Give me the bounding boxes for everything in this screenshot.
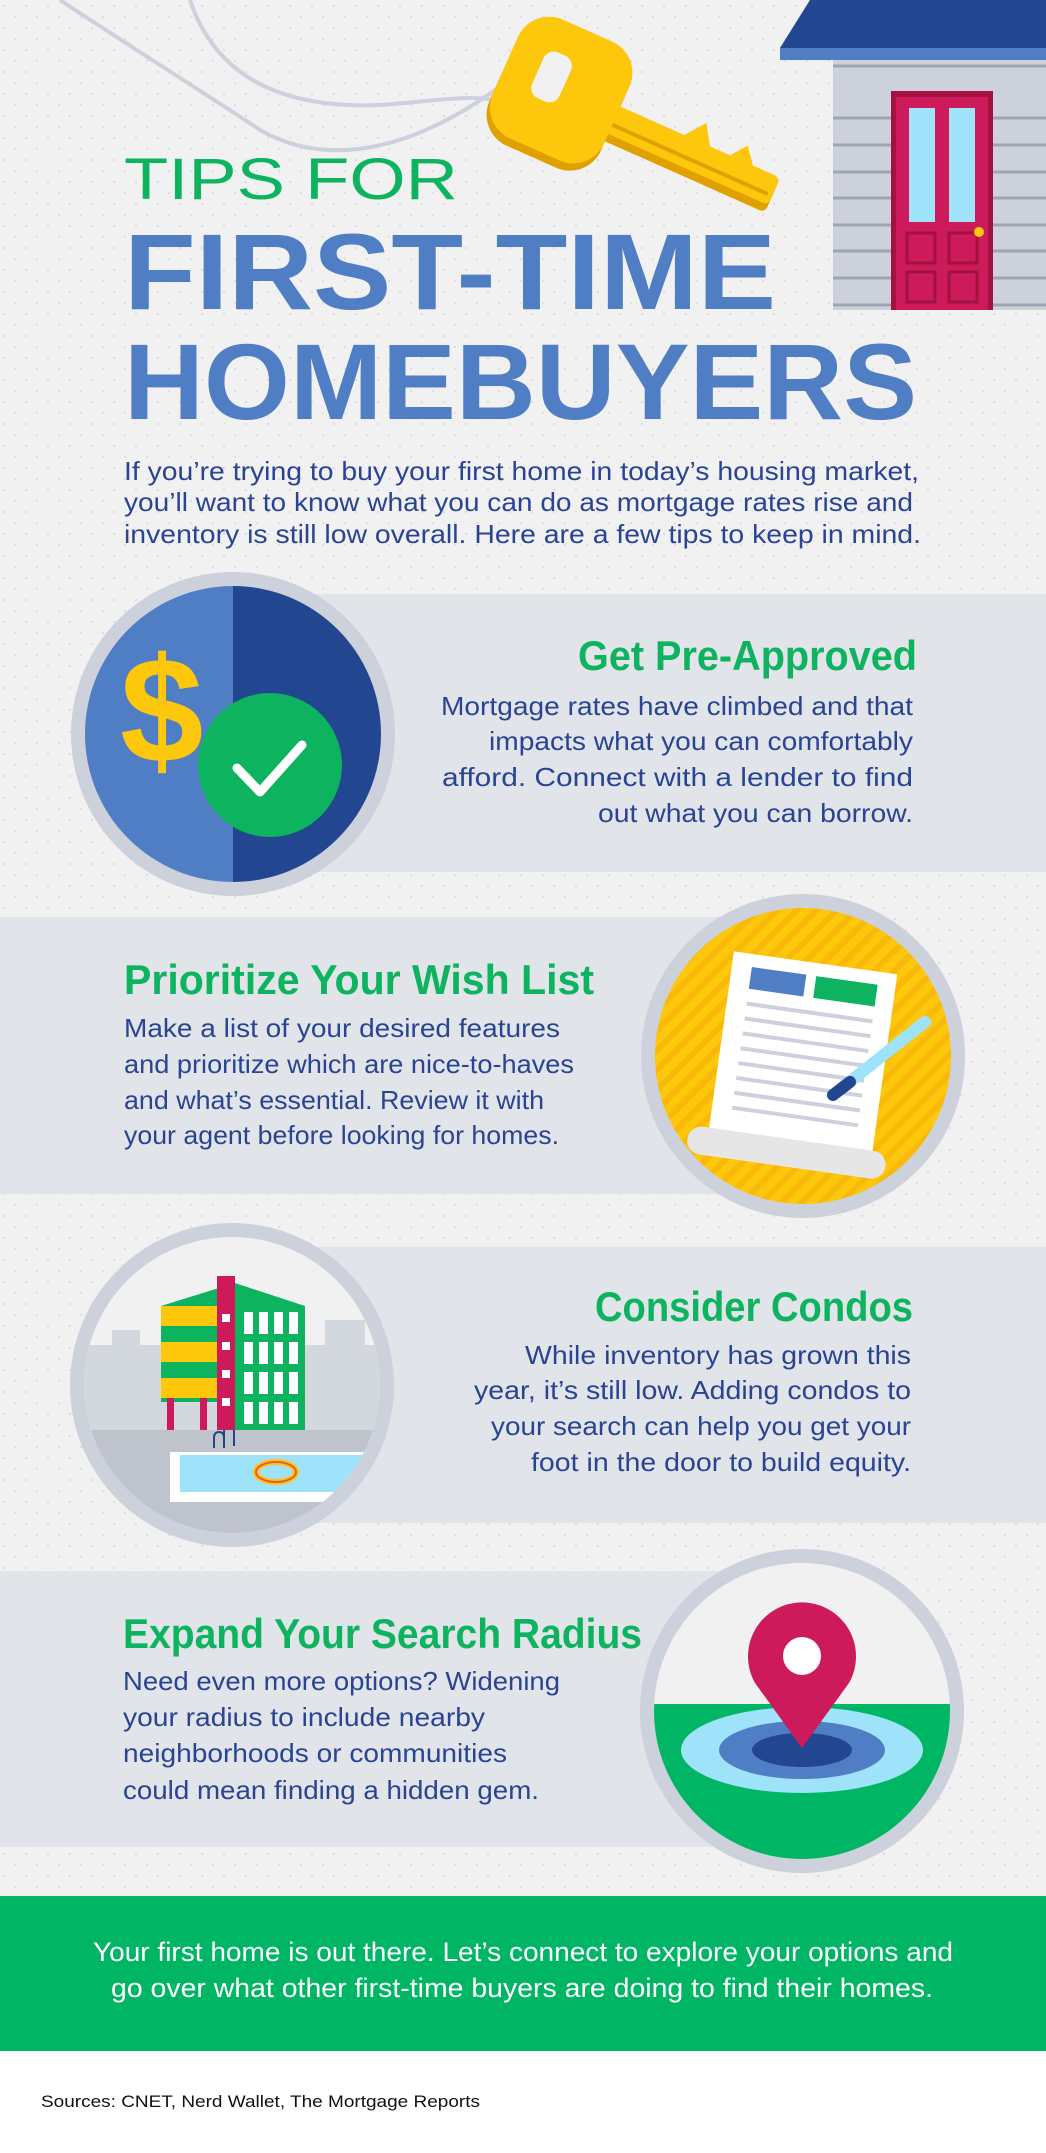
text: search radius body: Need even more options? Widening	[123, 1666, 560, 1696]
text: pre-approved body	[441, 691, 914, 828]
footer callout: Your first home is out there. Let’s connect to explore your options and	[93, 1937, 953, 1967]
panel: get pre-approved	[71, 572, 1046, 896]
illustration: key	[476, 6, 803, 253]
intro text: you’ll want to know what you can do as mortgage rates rise and	[124, 487, 913, 517]
text: pre-approved body: Mortgage rates have climbed and that	[441, 691, 914, 721]
footer callout	[0, 1896, 1046, 2051]
text: search radius body: could mean finding a hidden gem.	[123, 1775, 539, 1805]
heading: prioritize wish list: Prioritize Your Wish List	[124, 956, 594, 1003]
title	[124, 147, 917, 442]
sources: Sources: CNET, Nerd Wallet, The Mortgage Reports	[41, 2092, 480, 2111]
icon: door	[891, 91, 993, 310]
icon: dollar check	[71, 572, 395, 896]
text: pre-approved body: impacts what you can comfortably	[489, 726, 913, 756]
heading: get pre-approved: Get Pre-Approved	[578, 632, 917, 679]
text: wish list body: your agent before looking for homes.	[124, 1120, 559, 1150]
icon: dollar check: $	[120, 626, 203, 794]
heading: expand search radius: Expand Your Search Radius	[123, 1610, 642, 1657]
text: wish list body	[124, 1013, 574, 1150]
text: search radius body	[123, 1666, 560, 1805]
icon: map pin	[640, 1549, 970, 1874]
text: search radius body: neighborhoods or communities	[123, 1738, 507, 1768]
intro text: If you’re trying to buy your first home in today’s housing market,	[124, 456, 919, 486]
panel: prioritize wish list	[0, 894, 965, 1218]
text: condos body: year, it’s still low. Adding condos to	[474, 1375, 911, 1405]
illustration: house	[780, 0, 1046, 310]
text: condos body: your search can help you get your	[491, 1411, 911, 1441]
text: condos body: foot in the door to build equity.	[531, 1447, 911, 1477]
text: search radius body: your radius to include nearby	[123, 1702, 485, 1732]
footer callout: go over what other first-time buyers are doing to find their homes.	[111, 1973, 933, 2003]
panel: consider condos	[70, 1223, 1046, 1547]
text: pre-approved body: afford. Connect with a lender to find	[442, 762, 913, 792]
text: pre-approved body: out what you can borrow.	[598, 798, 913, 828]
icon: pen	[833, 1022, 925, 1095]
text: wish list body: and prioritize which are nice-to-haves	[124, 1049, 574, 1079]
intro text	[124, 456, 921, 549]
heading: consider condos: Consider Condos	[595, 1283, 913, 1330]
text: wish list body: Make a list of your desired features	[124, 1013, 560, 1043]
title: FIRST-TIME	[124, 211, 776, 332]
title: TIPS FOR	[124, 147, 458, 212]
icon: condo building	[70, 1223, 394, 1547]
intro text: inventory is still low overall. Here are a few tips to keep in mind.	[124, 519, 921, 549]
text: wish list body: and what’s essential. Review it with	[124, 1085, 544, 1115]
text: condos body: While inventory has grown this	[525, 1340, 911, 1370]
illustration: key strings	[60, 0, 520, 150]
panel: expand search radius	[0, 1549, 970, 1874]
text: condos body	[474, 1340, 911, 1477]
icon: wish list document	[641, 894, 965, 1218]
title: HOMEBUYERS	[124, 321, 917, 442]
